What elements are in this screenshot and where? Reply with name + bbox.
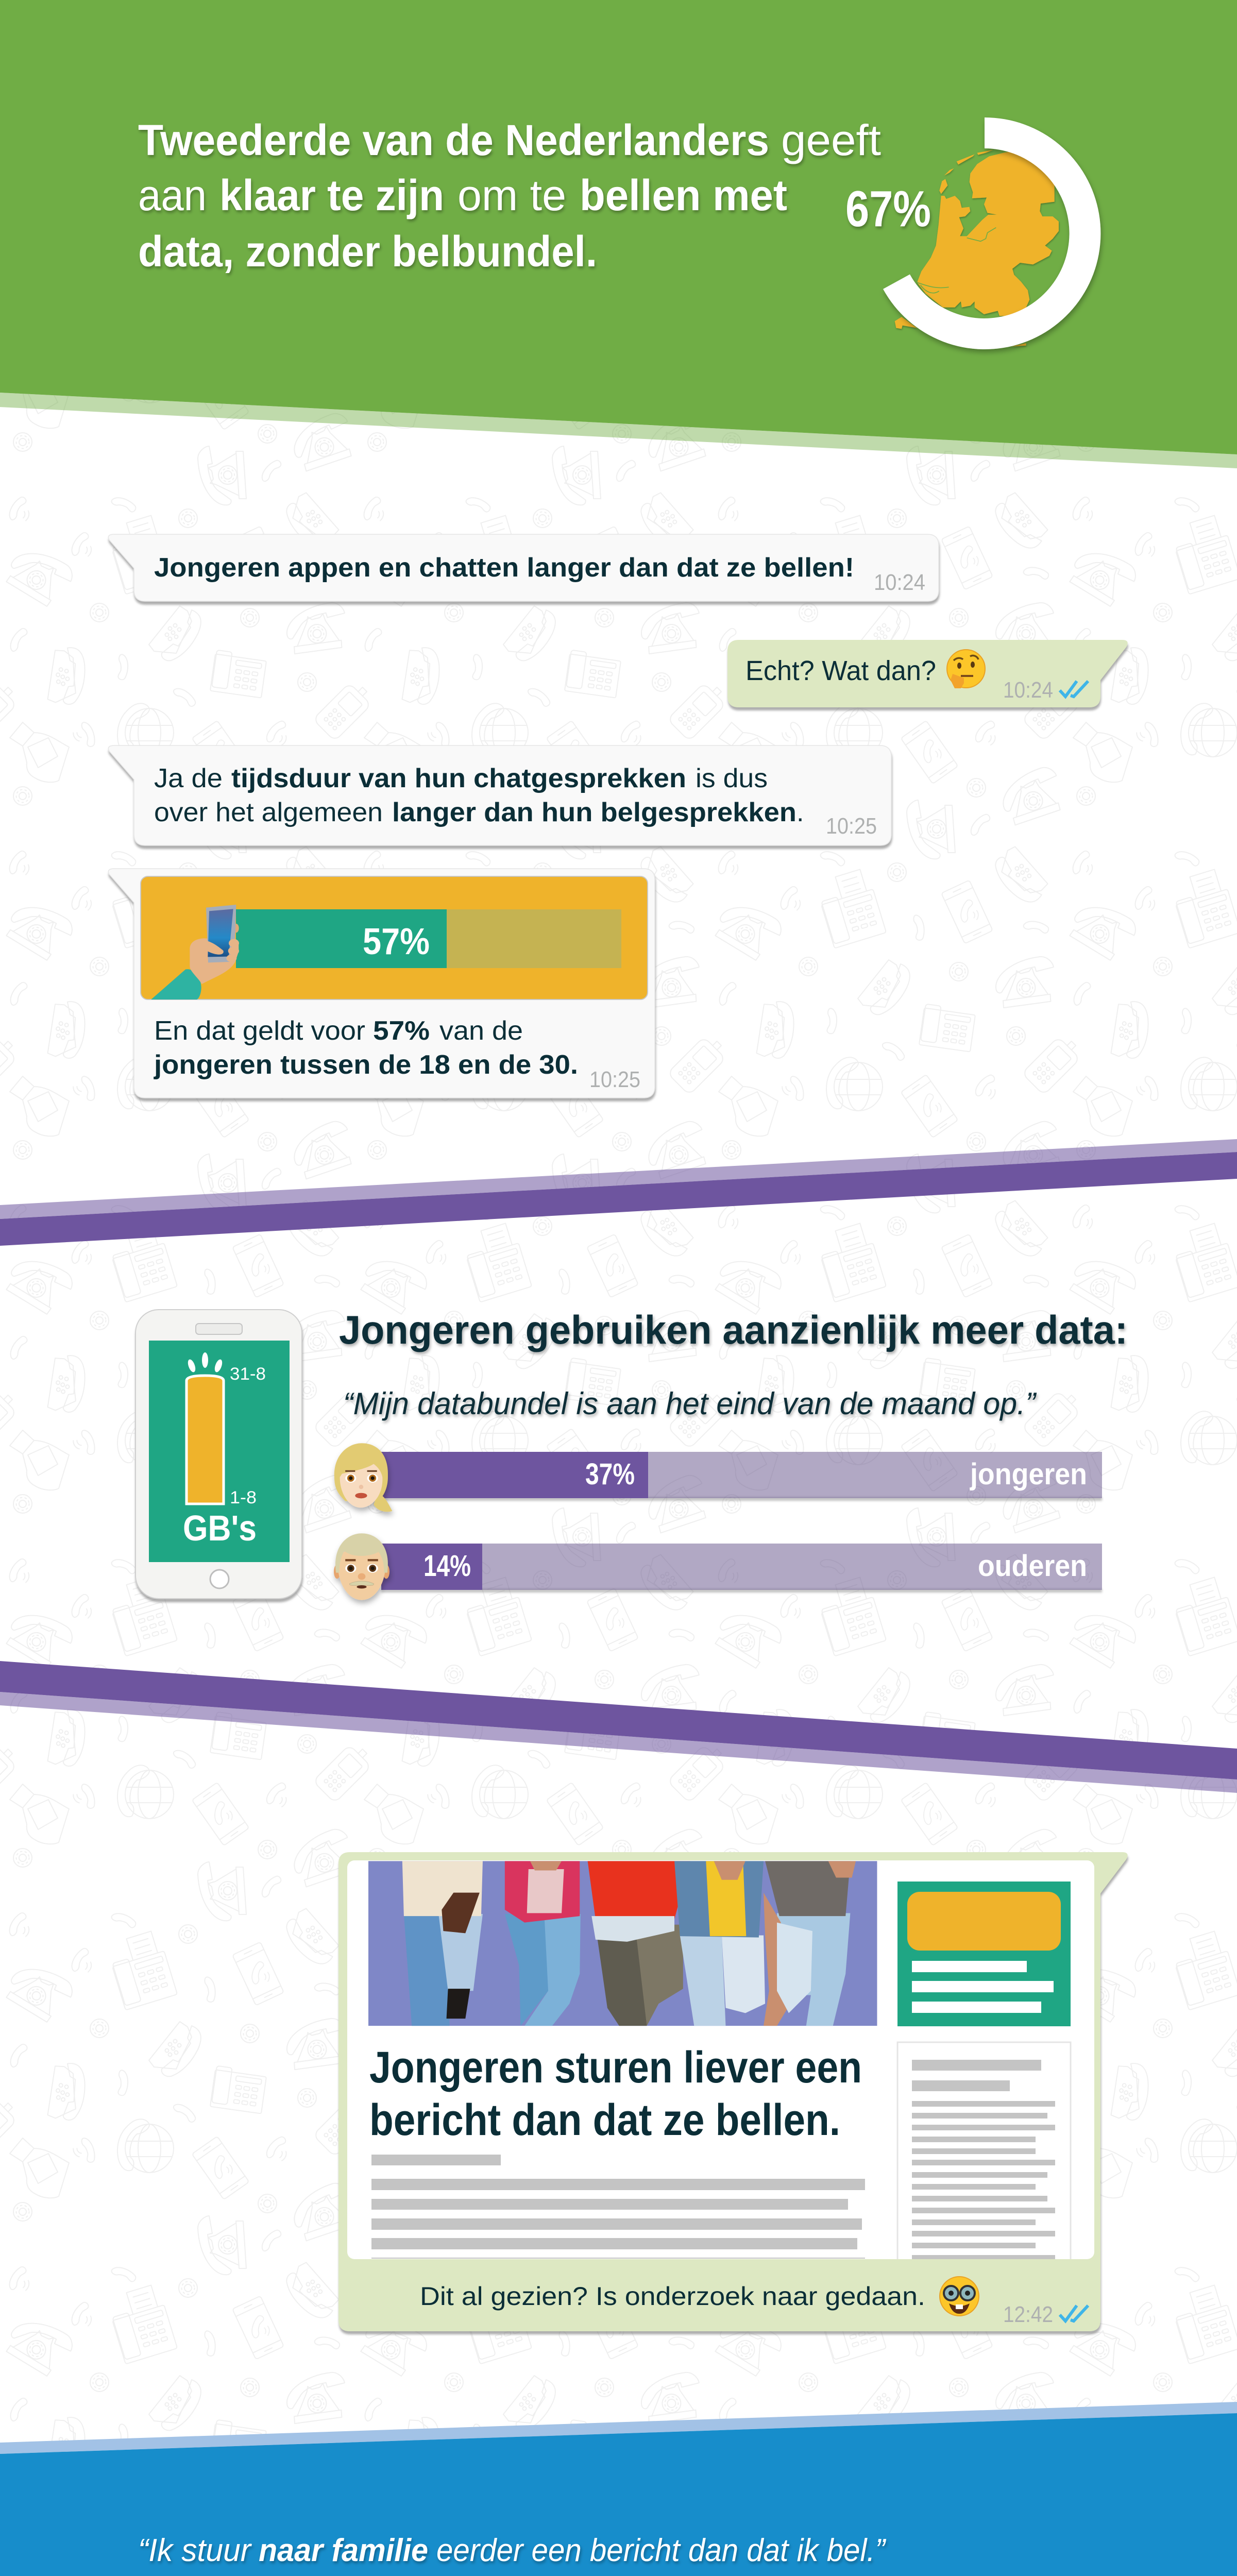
chat bubble 2 <box>727 640 1128 707</box>
heading: tweederde van de Nederlanders: om te <box>457 171 566 219</box>
quote: naar familie: naar familie <box>259 2533 428 2568</box>
chat bubble 1 <box>108 534 939 601</box>
article headline: bericht dan dat ze bellen. <box>369 2095 840 2145</box>
chat bubble 3: Ja de <box>154 764 223 793</box>
article sidebar card: text lines <box>897 2042 1071 2269</box>
icon: thinking face <box>947 650 985 688</box>
chat bubble 4 with 57% chart: 10:25 <box>589 1067 640 1092</box>
bar value 57% <box>236 909 447 968</box>
icon: sparks <box>187 1352 224 1373</box>
article headline <box>370 2050 859 2136</box>
chat bubble 3: is dus <box>696 764 768 793</box>
article headline: Jongeren sturen liever een <box>369 2043 862 2092</box>
quote: databundel: “Mijn databundel is aan het eind van de maand op.” <box>343 1386 1037 1421</box>
article body text lines <box>371 2155 865 2259</box>
chat bubble 2: Echt? Wat dan? <box>745 655 936 686</box>
heading: tweederde van de Nederlanders: bellen met <box>580 171 787 219</box>
quote: naar familie: “Ik stuur <box>138 2533 252 2568</box>
chat bubble 3 <box>108 745 891 845</box>
heading: tweederde van de Nederlanders: geeft <box>781 116 881 164</box>
heading: tweederde van de Nederlanders <box>138 116 881 276</box>
icon: young woman <box>334 1443 392 1512</box>
chart card <box>141 876 648 999</box>
icon: nerd face <box>940 2277 979 2316</box>
blue panel <box>0 2402 1237 2576</box>
bar: ouderen 14%: ouderen <box>978 1549 1087 1583</box>
article photo: young people with phones <box>368 1861 877 2026</box>
icon: hand holding phone <box>151 905 239 999</box>
quote: naar familie: eerder een bericht dan dat ik bel.” <box>436 2533 886 2568</box>
heading: tweederde van de Nederlanders: klaar te zijn <box>219 171 444 219</box>
chat bubble 4 with 57% chart <box>108 869 655 1098</box>
chat bubble 3: over het algemeen <box>154 798 383 827</box>
chat bubble 2: 10:24 <box>1003 677 1053 703</box>
purple divider bottom <box>0 1661 1237 1793</box>
icon: read ticks <box>1060 681 1088 697</box>
ring chart <box>883 117 1100 349</box>
battery bar <box>187 1376 224 1504</box>
icon: older man <box>334 1533 389 1600</box>
green header panel <box>0 0 1237 468</box>
heading: meer data: Jongeren gebruiken aanzienlijk meer data: <box>339 1307 1128 1352</box>
bar track <box>447 909 621 968</box>
chat bubble 3: . <box>797 798 804 827</box>
chat bubble: article: 12:42 <box>1003 2302 1053 2327</box>
heading: tweederde van de Nederlanders: data, zonder belbundel. <box>138 227 597 276</box>
chat bubble 4 with 57% chart: 57% <box>373 1016 430 1046</box>
chat bubble 4 with 57% chart: En dat geldt voor <box>154 1016 365 1046</box>
chat bubble 3: tijdsduur van hun chatgesprekken <box>231 764 686 793</box>
phone illustration with data battery <box>135 1310 302 1599</box>
map of the Netherlands with ring chart 67% <box>845 117 1100 349</box>
quote: naar familie <box>138 2533 886 2568</box>
chat bubble 1: 10:24 <box>874 570 925 595</box>
chat bubble 4 with 57% chart: van de <box>439 1016 523 1046</box>
bar: jongeren 37%: jongeren <box>970 1458 1087 1491</box>
bar: jongeren 37%: 37% <box>585 1458 635 1491</box>
article sidebar card: teal <box>897 1882 1071 2026</box>
chat bubble 4 with 57% chart: jongeren tussen de 18 en de 30. <box>154 1050 578 1080</box>
bar: ouderen 14% <box>334 1533 1102 1600</box>
chat bubble: article: Dit al gezien? Is onderzoek naar gedaan. <box>420 2282 925 2311</box>
bar: jongeren 37% <box>334 1443 1102 1512</box>
chat bubble: article <box>338 1852 1128 2331</box>
bar: ouderen 14%: 14% <box>423 1549 471 1583</box>
ring value: 67% <box>845 180 931 237</box>
chat bubble 3: 10:25 <box>826 814 877 839</box>
heading: tweederde van de Nederlanders: Tweederde van de Nederlanders <box>138 116 769 164</box>
heading: tweederde van de Nederlanders: aan <box>138 171 207 219</box>
phone illustration with data battery: 31-8 <box>230 1364 266 1384</box>
chat bubble 3: langer dan hun belgesprekken <box>392 798 797 827</box>
map of the Netherlands <box>895 144 1059 347</box>
chat bubble 4 with 57% chart: 57% <box>363 921 430 962</box>
chat bubble 1: Jongeren appen en chatten langer dan dat ze bellen! <box>154 553 854 583</box>
phone illustration with data battery: GB's <box>183 1508 257 1548</box>
phone illustration with data battery: 1-8 <box>230 1488 257 1507</box>
icon: read ticks <box>1060 2306 1088 2321</box>
purple divider top <box>0 1139 1237 1246</box>
